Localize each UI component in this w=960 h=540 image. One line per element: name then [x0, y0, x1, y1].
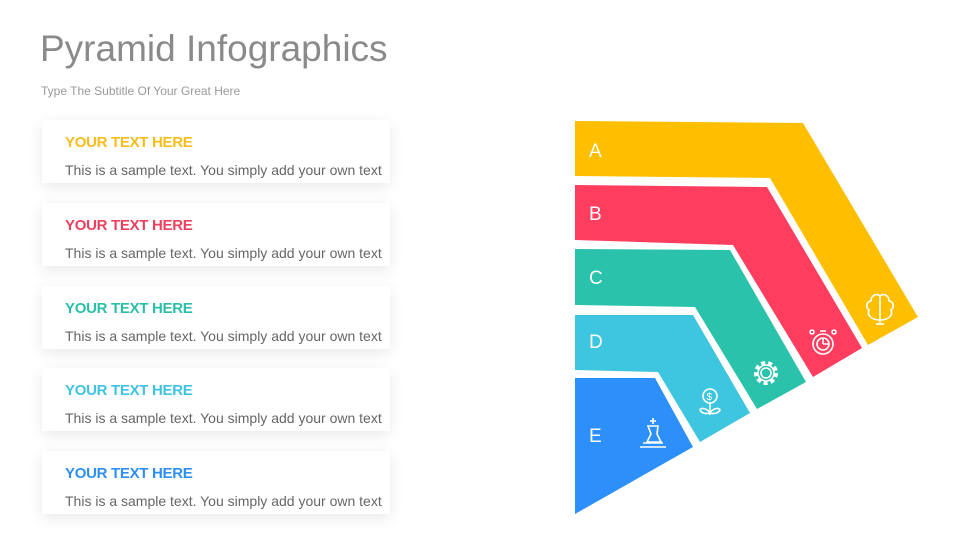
card: B: This is a sample text. You simply add your own text — [65, 245, 382, 261]
band A: A — [589, 141, 602, 162]
card: E — [42, 451, 390, 514]
card: A: YOUR TEXT HERE — [65, 134, 192, 151]
band E: E — [589, 426, 602, 447]
card: E: This is a sample text. You simply add your own text — [65, 493, 382, 509]
card: C: This is a sample text. You simply add your own text — [65, 328, 382, 344]
band E — [575, 378, 693, 514]
card: C: YOUR TEXT HERE — [65, 300, 192, 317]
band B — [575, 185, 862, 377]
card: A — [42, 120, 390, 183]
band B: B — [589, 204, 602, 225]
icon: brain — [867, 295, 893, 324]
card: C — [42, 286, 390, 349]
card: B — [42, 203, 390, 266]
title: Pyramid Infographics — [40, 28, 388, 69]
card: D: This is a sample text. You simply add your own text — [65, 410, 382, 426]
card: D: YOUR TEXT HERE — [65, 382, 192, 399]
card: A: This is a sample text. You simply add your own text — [65, 162, 382, 178]
band D: D — [589, 332, 603, 353]
band D — [575, 315, 750, 442]
band C — [575, 249, 806, 409]
icon: money flower: $ — [706, 392, 712, 403]
icon: stopwatch — [810, 330, 836, 354]
subtitle: Type The Subtitle Of Your Great Here — [41, 84, 240, 98]
icon: money flower — [700, 389, 720, 415]
icon: chess king — [640, 418, 666, 447]
band A — [575, 121, 918, 345]
card: D — [42, 368, 390, 431]
card: E: YOUR TEXT HERE — [65, 465, 192, 482]
card: B: YOUR TEXT HERE — [65, 217, 192, 234]
band C: C — [589, 268, 603, 289]
icon: gear — [756, 363, 776, 383]
